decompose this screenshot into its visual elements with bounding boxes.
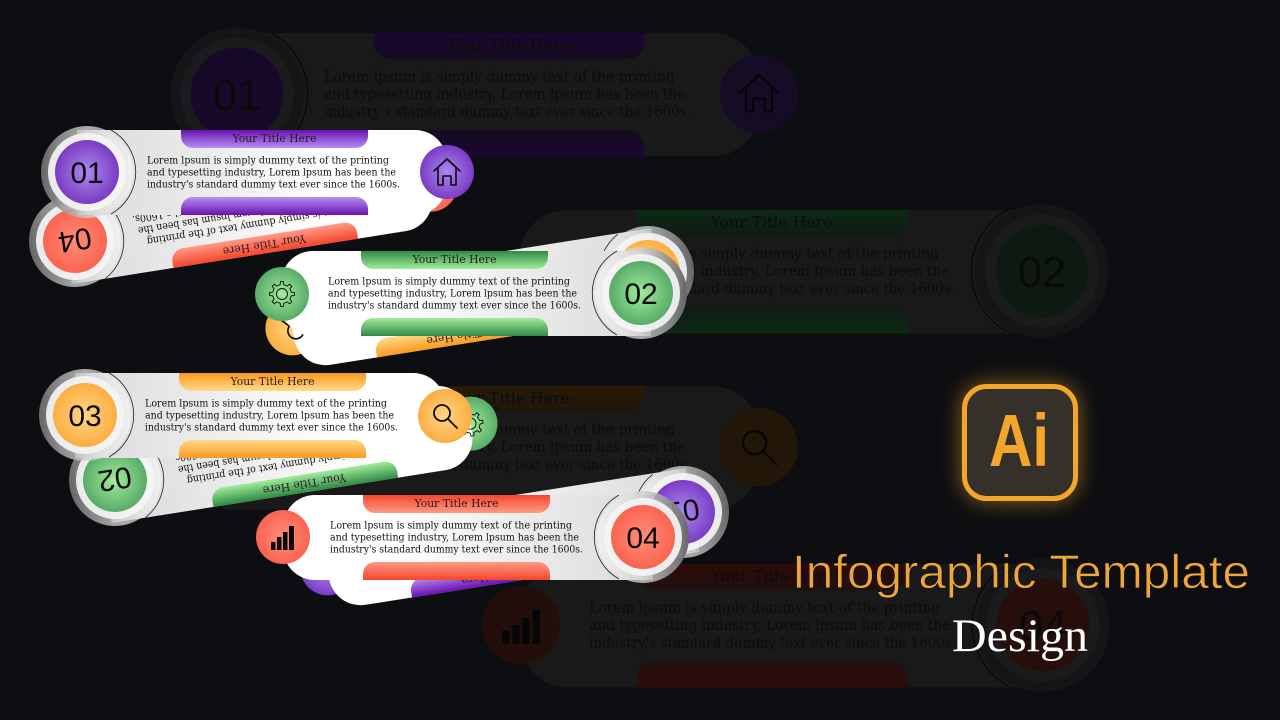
ghost card 01: and typesetting industry, Lorem lpsum has been the: [324, 85, 685, 103]
ghost card 04: and typesetting industry, Lorem lpsum has been the: [589, 616, 950, 634]
body text 01: and typesetting industry, Lorem lpsum has been the: [147, 166, 396, 178]
ghost card 04: Lorem lpsum is simply dummy text of the printing: [589, 599, 940, 617]
subheading: Design: Design: [952, 610, 1088, 662]
body text 03: industry's standard dummy text ever since the 1600s.: [145, 422, 398, 434]
number 02 badge: 02: [624, 278, 658, 311]
flipped card 01 behind card 04: Your Title Here: [461, 561, 547, 587]
body text 02: [328, 276, 581, 312]
flipped card 04 behind card 01: 04: [56, 221, 94, 258]
number 04 badge: 04: [626, 522, 660, 555]
ghost card 01: 01: [213, 72, 261, 120]
ghost card 01: industry's standard dummy text ever since the 1600s.: [324, 102, 691, 120]
ghost card 03: [222, 386, 798, 509]
number 03 badge: 03: [68, 400, 102, 433]
body text 04: Lorem lpsum is simply dummy text of the printing: [330, 520, 572, 532]
ghost card 04: [482, 558, 1110, 692]
ghost card 01: Your Title Here: [447, 36, 570, 54]
flipped card 03 behind card 02: [259, 219, 701, 378]
card 04: [256, 491, 689, 583]
ghost card 02: industry's standard dummy text ever since the 1600s.: [588, 279, 955, 297]
flipped card 02 behind card 03: Lorem lpsum is simply dummy text of the printing: [186, 436, 427, 486]
title 01: Your Title Here: [232, 132, 316, 145]
body text 03: Lorem lpsum is simply dummy text of the printing: [145, 398, 387, 410]
ghost card 04: Your Title Here: [711, 567, 833, 585]
ghost card 03: industry's standard dummy text ever since the 1600s.: [324, 455, 691, 473]
card 03: [39, 369, 472, 461]
body text 04: and typesetting industry, Lorem lpsum has been the: [330, 532, 579, 544]
body text 01: [147, 154, 400, 190]
ghost card 01: Lorem lpsum is simply dummy text of the printing: [324, 68, 675, 86]
flipped card 02 behind card 03: Your Title Here: [262, 471, 348, 497]
ghost card 04: industry's standard dummy text ever since the 1600s.: [589, 633, 956, 651]
ghost card 01: [170, 27, 798, 161]
body text 03: [145, 398, 398, 434]
card 01: [41, 126, 474, 218]
flipped card 01 behind card 04: 01: [664, 492, 702, 529]
number 02 badge: [592, 247, 687, 339]
body text 04: industry's standard dummy text ever since the 1600s.: [330, 544, 583, 556]
title 03: Your Title Here: [230, 375, 314, 388]
ghost card 02: Your Title Here: [710, 213, 832, 231]
body text 02: Lorem lpsum is simply dummy text of the printing: [328, 276, 570, 288]
ghost card 03: and typesetting industry, Lorem lpsum has been the: [324, 438, 685, 456]
flipped card 04 behind card 01: Lorem lpsum is simply dummy text of the printing: [146, 197, 387, 247]
flipped card 02 behind card 03: and typesetting industry, Lorem lpsum has been the: [177, 425, 425, 475]
number 04 badge: [594, 491, 689, 583]
Adobe Illustrator logo: [962, 384, 1078, 501]
body text 02: and typesetting industry, Lorem lpsum has been the: [328, 288, 577, 300]
flipped card 04 behind card 01: [22, 135, 464, 294]
flipped card 03 behind card 02: Your Title Here: [426, 321, 512, 347]
flipped card 04 behind card 01: and typesetting industry, Lorem lpsum has been the: [137, 186, 385, 236]
icon: magnifier: [418, 389, 472, 443]
ghost card 03: Your Title Here: [447, 389, 570, 407]
ghost card 02: Lorem lpsum is simply dummy text of the printing: [588, 245, 939, 263]
number 01 badge: [41, 126, 136, 218]
body text 03: and typesetting industry, Lorem lpsum has been the: [145, 410, 394, 422]
title 04: Your Title Here: [414, 497, 498, 510]
flipped card 02 behind card 03: 02: [96, 460, 134, 497]
flipped card 04 behind card 01: industry's standard dummy text ever since the 1600s.: [131, 174, 383, 225]
ghost card 03: Lorem lpsum is simply dummy text of the printing: [324, 421, 675, 439]
icon: signal bars: [256, 510, 310, 564]
ghost card 02: 02: [1018, 249, 1066, 297]
flipped card 02 behind card 03: [62, 374, 504, 533]
icon: gear: [255, 267, 309, 321]
ghost card 02: [520, 204, 1109, 338]
body text 02: industry's standard dummy text ever since the 1600s.: [328, 300, 581, 312]
number 03 badge: [39, 369, 134, 461]
flipped card 02 behind card 03: industry's standard dummy text ever since the 1600s.: [171, 413, 423, 464]
title 02: Your Title Here: [412, 253, 496, 266]
ghost card 02: and typesetting industry, Lorem lpsum has been the: [588, 262, 949, 280]
body text 01: Lorem lpsum is simply dummy text of the printing: [147, 154, 389, 166]
Adobe Illustrator logo: Ai: [989, 399, 1049, 482]
icon: house: [420, 145, 474, 199]
card 02: [255, 247, 687, 339]
ghost card 04: 04: [1019, 603, 1067, 651]
body text 04: [330, 520, 583, 556]
flipped card 01 behind card 04: [294, 459, 736, 618]
body text 01: industry's standard dummy text ever since the 1600s.: [147, 178, 400, 190]
flipped card 04 behind card 01: Your Title Here: [222, 232, 308, 258]
heading: Infographic Template: Infographic Template: [792, 545, 1250, 598]
number 01 badge: 01: [70, 157, 104, 190]
